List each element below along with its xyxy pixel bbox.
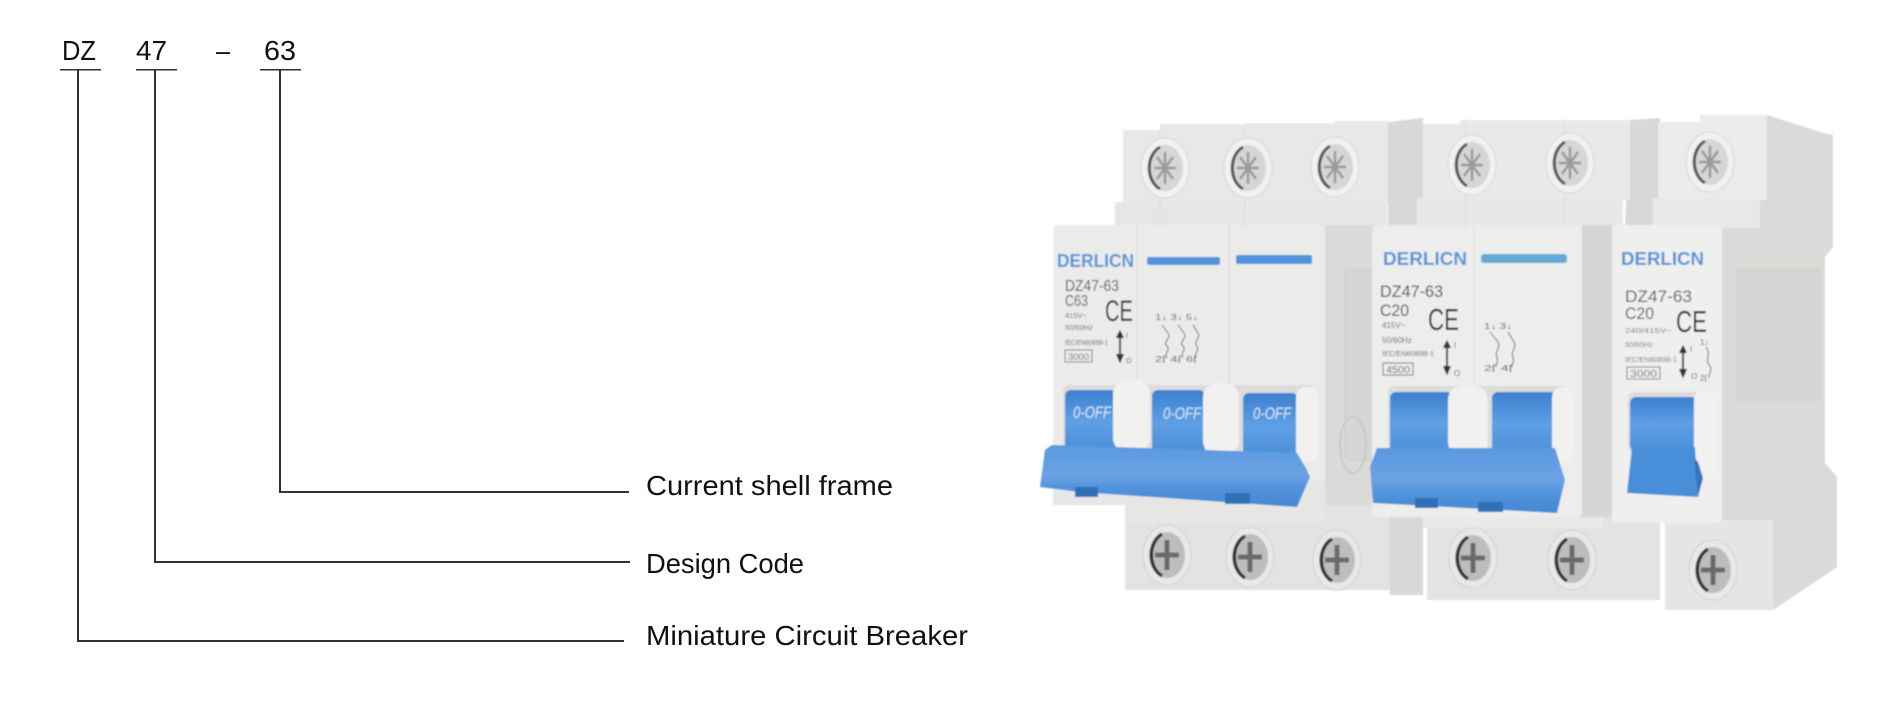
brand and ratings: I: [1690, 345, 1692, 354]
brand and ratings: [1621, 249, 1711, 383]
breaker: single-pole: [1612, 115, 1837, 610]
brand and ratings: 50/60Hz: [1065, 323, 1093, 332]
brand and ratings: IEC/EN60898-1: [1382, 351, 1434, 358]
leader line: 63 to Current shell frame: [280, 70, 629, 492]
brand and ratings: 2⌈: [1700, 374, 1708, 383]
brand and ratings: CE: [1428, 302, 1459, 337]
brand and ratings: 240/415V~: [1625, 328, 1672, 335]
code part: 47: [136, 35, 177, 70]
terminal screws: [1141, 137, 1361, 590]
brand and ratings: 2⌈ 4⌈: [1484, 364, 1514, 373]
brand and ratings: DERLICN: [1383, 249, 1467, 269]
brand and ratings: O: [1454, 369, 1460, 378]
brand and ratings: C20: [1380, 301, 1409, 320]
brand and ratings: 415V~: [1382, 321, 1406, 330]
brand and ratings: DZ47-63: [1065, 278, 1119, 295]
brand and ratings: IEC/EN60898-1: [1625, 357, 1677, 364]
brand and ratings: DZ47-63: [1380, 282, 1443, 301]
brand and ratings: 3000: [1630, 369, 1658, 380]
brand and ratings: DZ47-63: [1625, 287, 1692, 306]
brand and ratings: 2⌈ 4⌈ 6⌈: [1155, 355, 1198, 364]
brand and ratings: CE: [1676, 304, 1707, 339]
housing: [1372, 118, 1660, 600]
terminal screws: [1448, 133, 1596, 590]
code part: dash: –: [216, 35, 230, 66]
label: Design Code: Design Code: [646, 548, 804, 579]
brand and ratings: I: [1126, 333, 1128, 340]
toggles and handle bar: [1040, 380, 1318, 507]
code part: DZ: DZ: [62, 35, 96, 66]
label: Current shell frame: Current shell frame: [646, 470, 893, 501]
terminal screws: [1686, 132, 1737, 600]
brand and ratings: DERLICN: [1621, 249, 1704, 269]
toggles and handle bar: [1370, 386, 1574, 513]
brand and ratings: O: [1691, 372, 1697, 381]
housing: [1612, 115, 1837, 610]
brand and ratings: CE: [1105, 295, 1133, 328]
brand and ratings: C63: [1065, 293, 1088, 310]
toggles and handle bar: 0-OFF: [1073, 403, 1112, 422]
brand and ratings: 415V~: [1065, 311, 1088, 320]
brand and ratings: IEC/EN60898-1: [1065, 340, 1108, 347]
brand and ratings: 4500: [1386, 365, 1410, 376]
title: model code DZ 47 - 63: [60, 35, 301, 70]
brand and ratings: I: [1454, 341, 1456, 350]
label: Miniature Circuit Breaker: Miniature Circuit Breaker: [646, 620, 968, 651]
brand and ratings: DERLICN: [1057, 251, 1134, 271]
brand and ratings: [1057, 251, 1312, 365]
brand and ratings: 3000: [1068, 352, 1089, 363]
leader line: 47 to Design Code: [155, 70, 630, 562]
brand and ratings: 50/60Hz: [1625, 340, 1653, 349]
brand and ratings: O: [1126, 358, 1132, 365]
breaker: three-pole: [1040, 118, 1423, 595]
brand and ratings: [1380, 249, 1567, 378]
brand and ratings: 1↓ 3↓ 5↓: [1155, 313, 1198, 322]
code part: 47: 47: [136, 35, 167, 66]
product photo: three DZ47-63 miniature circuit breakers: [1040, 115, 1837, 610]
toggles and handle bar: 0-OFF: [1253, 404, 1292, 423]
housing: [1053, 118, 1423, 595]
brand and ratings: C20: [1625, 304, 1654, 323]
toggles and handle bar: 0-OFF: [1163, 404, 1202, 423]
brand and ratings: 1↓ 3↓: [1484, 322, 1512, 331]
toggle: [1627, 390, 1716, 497]
brand and ratings: 1↓: [1700, 338, 1708, 347]
brand and ratings: 50/60Hz: [1382, 336, 1412, 345]
code part: 63: [260, 35, 301, 70]
leader line: DZ to Miniature Circuit Breaker: [78, 70, 624, 641]
breaker: two-pole: [1370, 118, 1660, 600]
code part: 63: 63: [264, 35, 296, 66]
